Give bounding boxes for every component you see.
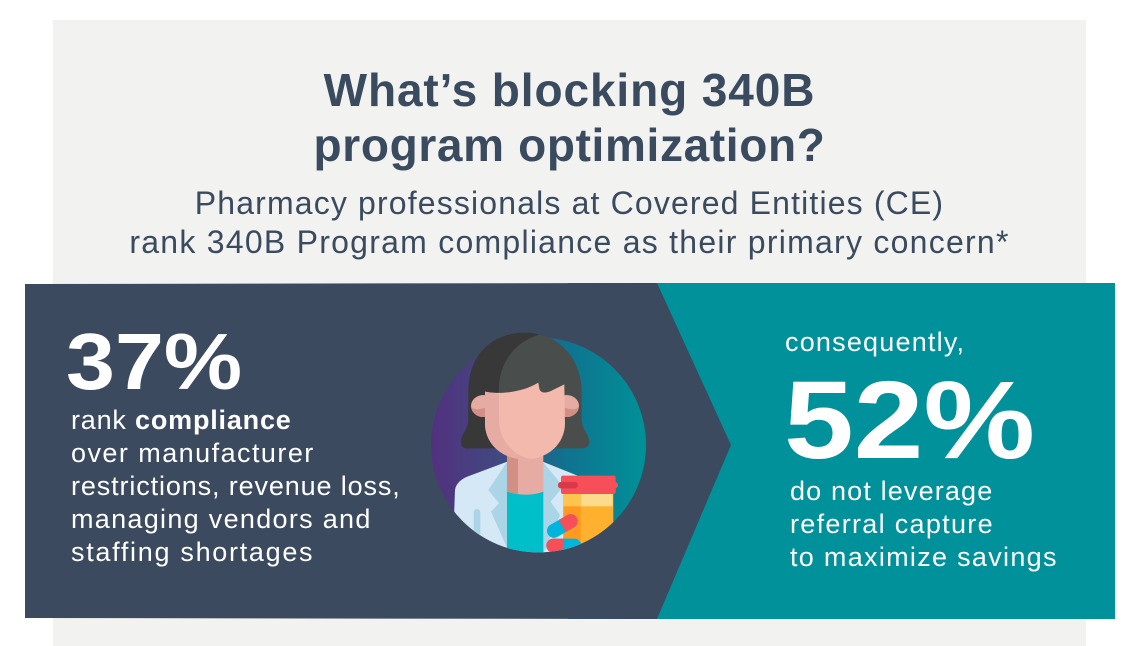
text: referral capture description bbox=[790, 476, 1058, 572]
title bbox=[314, 64, 825, 171]
pills bbox=[546, 514, 578, 538]
bottle bbox=[563, 494, 614, 550]
title: What’s blocking 340B bbox=[324, 64, 815, 116]
subtitle: rank 340B Program compliance as their primary concern* bbox=[129, 224, 1010, 260]
neck bbox=[507, 453, 543, 495]
stat: 52%: 52% bbox=[784, 359, 1035, 482]
ears bbox=[471, 395, 496, 417]
text: compliance description: rank compliance bbox=[71, 405, 292, 435]
text: compliance description bbox=[71, 405, 401, 567]
face bbox=[485, 383, 565, 459]
text: referral capture description: referral capture bbox=[790, 509, 994, 539]
text: compliance description: restrictions, revenue loss, bbox=[71, 471, 401, 501]
text: referral capture description: do not leverage bbox=[790, 476, 993, 506]
stat: 37%: 37% bbox=[66, 317, 242, 406]
text: compliance description: over manufacturer bbox=[71, 438, 315, 468]
text: compliance description: managing vendors and bbox=[71, 504, 372, 534]
shirt bbox=[507, 492, 543, 555]
text: referral capture description: to maximize savings bbox=[790, 542, 1058, 572]
lab coat bbox=[453, 462, 580, 553]
subtitle: Pharmacy professionals at Covered Entities (CE) bbox=[195, 185, 944, 221]
hair bbox=[461, 333, 589, 448]
title: program optimization? bbox=[314, 119, 825, 171]
text: compliance description: staffing shortages bbox=[71, 537, 314, 567]
icon: pharmacist bbox=[431, 333, 646, 556]
panel: navy arrow left bbox=[25, 283, 731, 619]
banner with arrow bbox=[25, 283, 1115, 619]
text: consequently: consequently, bbox=[785, 327, 965, 357]
panel: teal right bbox=[568, 283, 1115, 619]
subtitle bbox=[129, 185, 1010, 260]
